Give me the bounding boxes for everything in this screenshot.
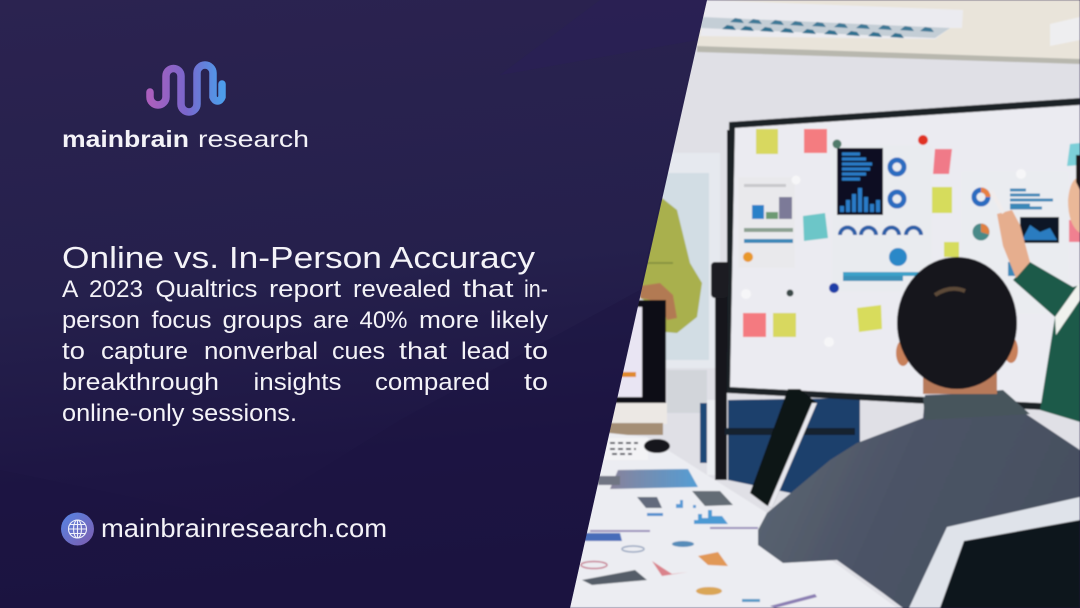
icon: brain wave mark (150, 65, 222, 112)
chart sheet right (962, 172, 1068, 313)
body text: breakthrough (62, 369, 219, 396)
body text: that (462, 276, 514, 303)
board stand (711, 130, 855, 480)
mouse (644, 439, 670, 453)
black chair (750, 389, 817, 508)
man in grey jacket (758, 257, 1080, 608)
panel: office photo (560, 0, 1080, 608)
body text: to (524, 369, 548, 396)
window (660, 153, 720, 475)
body text (62, 276, 549, 427)
website url: mainbrainresearch.com (101, 513, 387, 543)
body text: to (62, 338, 85, 365)
heading: Online vs. In-Person Accuracy (62, 240, 536, 275)
body text: cues (332, 338, 385, 365)
light fixture (700, 0, 963, 39)
body text: insights (254, 369, 342, 396)
body text: person (62, 307, 140, 334)
body text: 2023 (89, 276, 143, 303)
desk papers (581, 469, 817, 608)
ceiling trim (697, 46, 1080, 64)
body text: to (524, 338, 548, 365)
body text: more (419, 307, 479, 334)
wordmark: mainbrain: mainbrain (62, 126, 189, 152)
body text: capture (101, 338, 188, 365)
body text: lead (461, 338, 510, 365)
body text: focus (152, 307, 212, 334)
body text: in- (524, 276, 548, 303)
blue sofa (700, 398, 860, 495)
white chair (909, 497, 1080, 608)
desk (565, 432, 897, 608)
light louvres (700, 17, 950, 38)
wall (560, 0, 1080, 608)
body text: online-only sessions. (62, 400, 297, 427)
body text: revealed (353, 276, 451, 303)
sticky notes (743, 129, 1080, 337)
chart sheet centre (832, 145, 932, 292)
body text: A (62, 276, 79, 303)
person in olive shirt (640, 198, 702, 333)
body text: report (269, 276, 341, 303)
body text: likely (490, 307, 549, 334)
body text: Qualtrics (156, 276, 258, 303)
ceiling (697, 0, 1080, 60)
corner fixture (1050, 17, 1080, 46)
magnets (741, 135, 1026, 347)
website link (61, 512, 387, 546)
chart sheet left (738, 177, 795, 268)
panel: purple background (0, 0, 707, 608)
whiteboard (727, 98, 1080, 412)
body text: are (313, 307, 349, 334)
icon: globe (61, 512, 94, 546)
keyboard (603, 438, 648, 460)
body text: groups (222, 307, 302, 334)
body text: compared (375, 369, 490, 396)
monitor (606, 300, 667, 435)
body text: nonverbal (204, 338, 318, 365)
wordmark: research: research (198, 126, 309, 152)
woman presenting (989, 155, 1080, 422)
body text: that (399, 338, 447, 365)
logo (62, 65, 309, 152)
body text: 40% (360, 307, 408, 334)
